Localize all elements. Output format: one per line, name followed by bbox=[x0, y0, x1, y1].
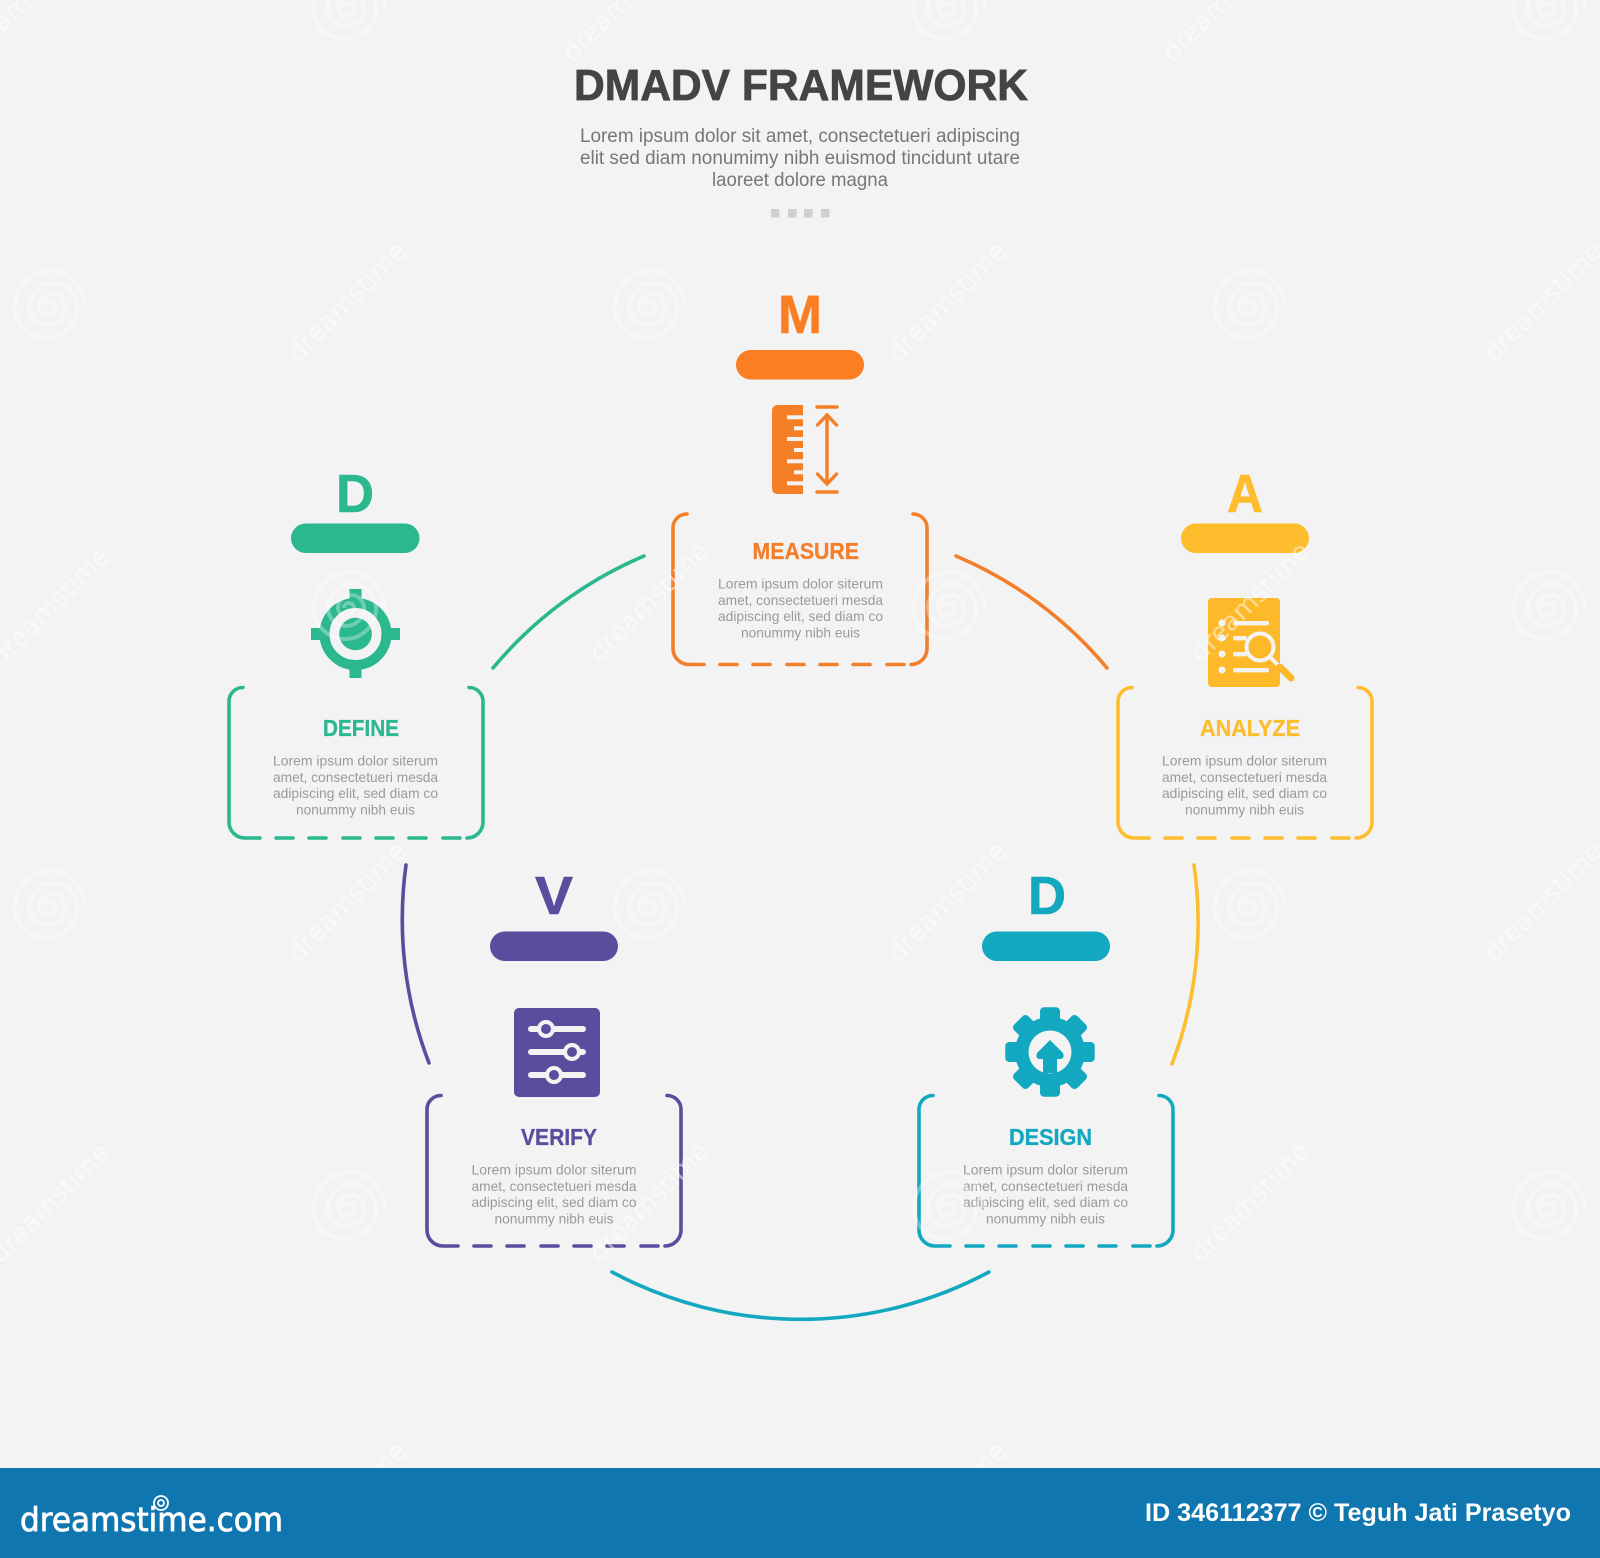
panel: define bbox=[229, 464, 483, 838]
pagination squares bbox=[771, 209, 830, 218]
description: analyze: Lorem ipsum dolor siterum bbox=[1162, 752, 1327, 768]
letter D: D bbox=[1028, 866, 1066, 926]
description: verify: adipiscing elit, sed diam co bbox=[472, 1194, 637, 1210]
watermark text: dreamstime bbox=[1185, 537, 1316, 668]
icon: document with magnifier bbox=[1208, 598, 1291, 687]
icon: target bbox=[311, 589, 400, 678]
footer bar bbox=[0, 1468, 1600, 1558]
subtitle: Lorem ipsum dolor sit amet, consectetueri adipiscing bbox=[580, 126, 1020, 147]
label: measure: MEASURE bbox=[752, 538, 859, 564]
frame: measure bbox=[673, 514, 927, 664]
description: define: nonummy nibh euis bbox=[296, 802, 415, 818]
bar: define bbox=[291, 524, 420, 553]
frame: design bbox=[919, 1096, 1173, 1246]
description: measure: Lorem ipsum dolor siterum bbox=[718, 575, 883, 591]
description: measure: adipiscing elit, sed diam co bbox=[718, 608, 883, 624]
description: design: nonummy nibh euis bbox=[986, 1211, 1105, 1227]
frame: define bbox=[229, 688, 483, 838]
bar: design bbox=[982, 932, 1110, 961]
footer credit: ID 346112377 © Teguh Jati Prasetyo bbox=[1145, 1499, 1571, 1527]
label: analyze: ANALYZE bbox=[1200, 715, 1300, 741]
label: verify: VERIFY bbox=[521, 1124, 597, 1150]
panel: design bbox=[919, 866, 1173, 1246]
watermark text: dreamstime bbox=[584, 537, 715, 668]
panel: measure bbox=[673, 285, 927, 664]
arc: yellow, analyze to design bbox=[1172, 865, 1198, 1064]
description: define: adipiscing elit, sed diam co bbox=[273, 785, 438, 801]
description: verify: nonummy nibh euis bbox=[494, 1211, 614, 1227]
description: verify bbox=[472, 1161, 637, 1227]
watermark text: dreamstime bbox=[282, 837, 413, 968]
frame: analyze bbox=[1118, 688, 1372, 838]
subtitle: laoreet dolore magna bbox=[712, 170, 888, 191]
description: design: amet, consectetueri mesda bbox=[963, 1178, 1128, 1194]
bar: measure bbox=[736, 350, 864, 380]
description: measure bbox=[718, 575, 883, 641]
watermark text: dreamstime bbox=[882, 237, 1013, 368]
description: define: Lorem ipsum dolor siterum bbox=[273, 752, 438, 768]
arc: green, define to measure bbox=[493, 556, 644, 668]
title: DMADV FRAMEWORK bbox=[574, 61, 1028, 110]
bar: analyze bbox=[1181, 524, 1309, 553]
letter A: A bbox=[1227, 464, 1263, 524]
watermark text: dreamstime bbox=[282, 237, 413, 368]
watermark spirals bbox=[15, 0, 1584, 1239]
description: verify: Lorem ipsum dolor siterum bbox=[472, 1161, 636, 1177]
label: design: DESIGN bbox=[1009, 1124, 1092, 1150]
watermark text: dreamstime bbox=[882, 837, 1013, 968]
description: design: adipiscing elit, sed diam co bbox=[963, 1194, 1128, 1210]
description: define: amet, consectetueri mesda bbox=[273, 769, 438, 785]
icon: sliders bbox=[514, 1008, 600, 1097]
subtitle: elit sed diam nonumimy nibh euismod tincidunt utare bbox=[580, 148, 1020, 169]
description: define bbox=[273, 752, 438, 818]
icon: gear with up arrow bbox=[1005, 1007, 1095, 1097]
description: analyze: amet, consectetueri mesda bbox=[1162, 769, 1327, 785]
icon: ruler with height arrow bbox=[772, 405, 837, 494]
label: define: DEFINE bbox=[323, 715, 399, 741]
description: measure: nonummy nibh euis bbox=[741, 625, 860, 641]
watermark text: dreamstime bbox=[1185, 1137, 1316, 1268]
arc: orange, measure to analyze bbox=[956, 556, 1107, 668]
description: design bbox=[963, 1161, 1128, 1227]
footer logo: dreamstime.com bbox=[20, 1500, 283, 1539]
letter M: M bbox=[778, 285, 822, 345]
description: design: Lorem ipsum dolor siterum bbox=[963, 1161, 1128, 1177]
frame: verify bbox=[427, 1096, 681, 1246]
arc: purple, verify to define bbox=[402, 865, 429, 1063]
bar: verify bbox=[490, 932, 618, 961]
icon: spiral bbox=[154, 1496, 168, 1510]
description: verify: amet, consectetueri mesda bbox=[472, 1178, 637, 1194]
letter V: V bbox=[535, 866, 573, 926]
panel: verify bbox=[427, 866, 681, 1246]
description: analyze: nonummy nibh euis bbox=[1185, 802, 1304, 818]
letter D: D bbox=[336, 464, 374, 524]
description: analyze bbox=[1162, 752, 1327, 818]
watermark text: dreamstime bbox=[584, 1137, 715, 1268]
subtitle bbox=[580, 126, 1020, 191]
description: measure: amet, consectetueri mesda bbox=[718, 592, 883, 608]
arc: teal, design to verify bbox=[612, 1272, 989, 1319]
description: analyze: adipiscing elit, sed diam co bbox=[1162, 785, 1327, 801]
panel: analyze bbox=[1118, 464, 1372, 838]
